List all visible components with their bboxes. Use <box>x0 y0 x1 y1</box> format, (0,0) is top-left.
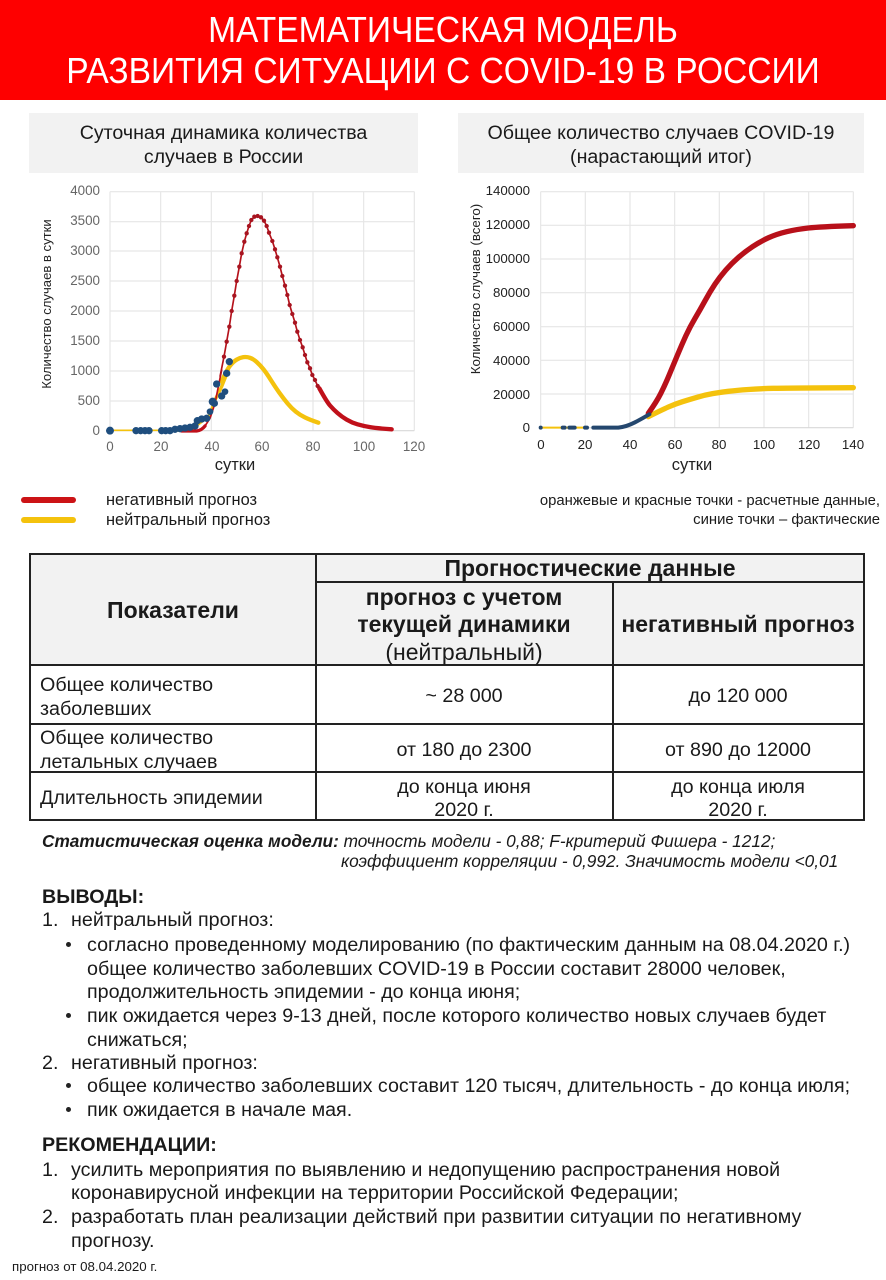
model statistics note: коэффициент корреляции - 0,992. Значимость модели <0,01 <box>341 851 838 871</box>
heading: daily dynamics: Суточная динамика количества <box>80 122 367 144</box>
recommendations: 1. <box>42 1159 58 1181</box>
table rows: от 890 до 12000 <box>665 739 811 761</box>
chart: cumulative cases: 0 <box>523 420 530 435</box>
legend: forecasts <box>21 491 270 529</box>
chart: daily cases: 40 <box>205 439 219 454</box>
conclusions: общее количество заболевших COVID-19 в России составит 28000 человек, <box>87 958 786 980</box>
chart: daily cases: 1500 <box>70 333 100 348</box>
heading: daily dynamics: случаев в России <box>144 146 303 168</box>
chart: cumulative cases: 100 <box>753 437 775 452</box>
chart: cumulative cases: Количество случаев (всего) <box>468 204 483 374</box>
recommendations: прогнозу. <box>71 1230 154 1252</box>
actual data points <box>106 358 233 435</box>
chart: cumulative cases: 20 <box>578 437 592 452</box>
neutral curve baseline <box>110 370 228 430</box>
recommendations: 2. <box>42 1206 58 1228</box>
table rows: от 180 до 2300 <box>396 739 532 761</box>
table headers: Показатели <box>107 597 239 623</box>
table headers: Прогностические данные <box>444 555 736 581</box>
negative cumulative curve <box>648 226 853 413</box>
chart: daily cases: 2000 <box>70 303 100 318</box>
chart: daily cases: 0 <box>93 423 100 438</box>
conclusions: 2. <box>42 1052 58 1074</box>
note: point colours: синие точки – фактические <box>693 512 880 528</box>
title banner: МАТЕМАТИЧЕСКАЯ МОДЕЛЬ <box>208 9 678 50</box>
chart: daily cases <box>39 183 425 474</box>
heading: cumulative total: (нарастающий итог) <box>570 146 752 168</box>
recommendations: разработать план реализации действий при развитии ситуации по негативному <box>71 1206 801 1228</box>
table headers: текущей динамики <box>357 611 571 637</box>
chart: daily cases: 4000 <box>70 183 100 198</box>
table rows: заболевших <box>40 698 151 720</box>
chart: cumulative cases <box>468 183 864 474</box>
conclusions: негативный прогноз: <box>71 1052 258 1074</box>
note: point colours <box>540 493 880 528</box>
table rows: до 120 000 <box>688 685 788 707</box>
chart: cumulative cases: 40 <box>623 437 637 452</box>
chart: daily cases: 80 <box>306 439 320 454</box>
heading: daily dynamics <box>29 113 418 173</box>
table rows: до конца июля <box>671 776 805 798</box>
chart: daily cases: 2500 <box>70 273 100 288</box>
chart: daily cases: Количество случаев в сутки <box>39 219 54 389</box>
forecast date: прогноз от 08.04.2020 г. <box>12 1259 157 1274</box>
conclusions: 1. <box>42 909 58 931</box>
table rows: 2020 г. <box>434 799 494 821</box>
table rows: летальных случаев <box>40 751 217 773</box>
chart: daily cases: 500 <box>78 393 100 408</box>
chart: daily cases: 60 <box>255 439 269 454</box>
chart: cumulative cases: 140 <box>842 437 864 452</box>
chart: cumulative cases: 120000 <box>486 217 530 232</box>
chart: cumulative cases: 80 <box>712 437 726 452</box>
chart: cumulative cases: 60 <box>668 437 682 452</box>
chart: daily cases: 120 <box>403 439 425 454</box>
chart: cumulative cases: 60000 <box>493 319 530 334</box>
recommendations: коронавирусной инфекции на территории Российской Федерации; <box>71 1182 678 1204</box>
conclusions: согласно проведенному моделированию (по фактическим данным на 08.04.2020 г.) <box>87 934 850 956</box>
table rows: Длительность эпидемии <box>40 787 263 809</box>
chart: cumulative cases: 20000 <box>493 387 530 402</box>
model statistics note: Статистическая оценка модели: точность модели - 0,88; F-критерий Фишера - 1212; <box>42 831 775 851</box>
neutral curve <box>222 357 318 423</box>
recommendations: усилить мероприятия по выявлению и недопущению распространения новой <box>71 1159 780 1181</box>
conclusions: общее количество заболевших составит 120 тысяч, длительность - до конца июля; <box>87 1075 850 1097</box>
negative curve <box>220 214 392 429</box>
table headers: прогноз с учетом <box>366 584 562 610</box>
recommendations <box>42 1134 802 1252</box>
table headers: (нейтральный) <box>385 639 543 665</box>
chart: cumulative cases: 0 <box>537 437 545 452</box>
forecast table <box>29 553 865 821</box>
neutral cumulative curve <box>648 388 853 417</box>
conclusions: снижаться; <box>87 1029 188 1051</box>
chart: daily cases: 1000 <box>70 363 100 378</box>
chart: daily cases: сутки <box>215 456 255 474</box>
chart: cumulative cases: 120 <box>798 437 820 452</box>
table rows: Общее количество <box>40 727 213 749</box>
table rows: до конца июня <box>397 776 531 798</box>
chart: cumulative cases: 140000 <box>486 183 530 198</box>
table rows <box>40 674 811 821</box>
conclusions: пик ожидается в начале мая. <box>87 1099 352 1121</box>
chart: cumulative cases: 80000 <box>493 285 530 300</box>
conclusions: продолжительность эпидемии - до конца июня; <box>87 981 520 1003</box>
legend: forecasts: нейтральный прогноз <box>106 511 270 529</box>
note: point colours: оранжевые и красные точки - расчетные данные, <box>540 493 880 509</box>
chart: daily cases: 3500 <box>70 213 100 228</box>
table rows: 2020 г. <box>708 799 768 821</box>
title banner <box>0 0 886 100</box>
neutral baseline <box>541 425 583 431</box>
chart: daily cases: 20 <box>154 439 168 454</box>
recommendations: РЕКОМЕНДАЦИИ: <box>42 1134 217 1156</box>
chart: cumulative cases: 40000 <box>493 353 530 368</box>
table rows: ~ 28 000 <box>425 685 503 707</box>
heading: cumulative total: Общее количество случаев COVID-19 <box>488 122 834 144</box>
chart: daily cases: 3000 <box>70 243 100 258</box>
conclusions: нейтральный прогноз: <box>71 909 274 931</box>
chart: daily cases: 0 <box>106 439 114 454</box>
model statistics note <box>42 831 838 871</box>
conclusions: ВЫВОДЫ: <box>42 886 144 908</box>
chart: daily cases: 100 <box>353 439 375 454</box>
table rows: Общее количество <box>40 674 213 696</box>
heading: cumulative total <box>458 113 864 173</box>
chart: cumulative cases: 100000 <box>486 251 530 266</box>
table headers <box>107 555 855 665</box>
legend: forecasts: негативный прогноз <box>106 491 257 509</box>
table headers: негативный прогноз <box>621 611 855 637</box>
conclusions: пик ожидается через 9-13 дней, после которого количество новых случаев будет <box>87 1005 826 1027</box>
title banner: РАЗВИТИЯ СИТУАЦИИ С COVID-19 В РОССИИ <box>66 50 820 91</box>
actual cumulative data <box>541 414 649 428</box>
chart: cumulative cases: сутки <box>672 456 712 474</box>
conclusions <box>42 886 850 1121</box>
negative curve low section <box>182 370 222 431</box>
